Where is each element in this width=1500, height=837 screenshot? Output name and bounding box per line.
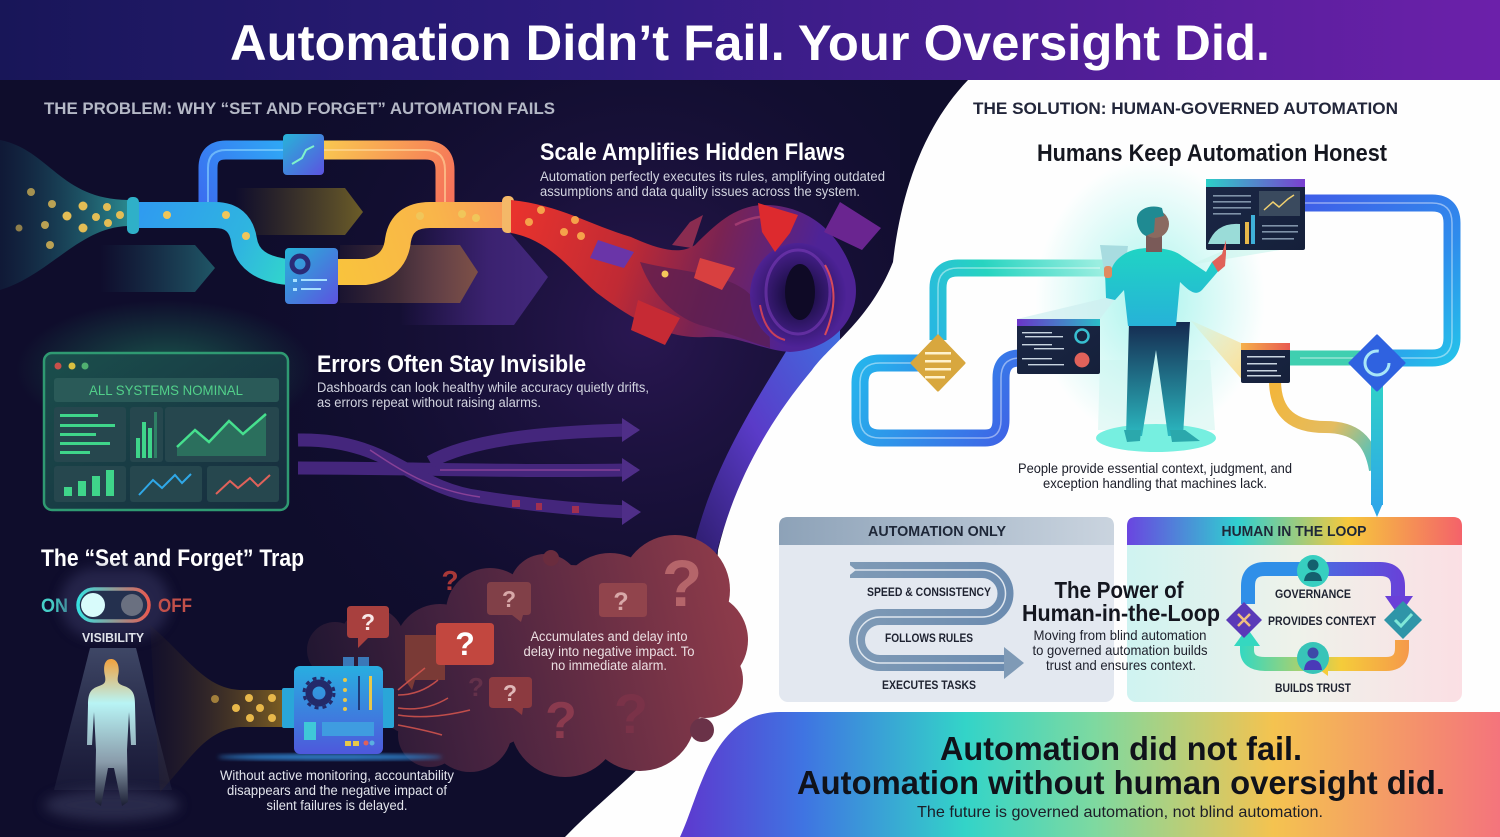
spotlight person xyxy=(44,648,180,821)
connector pipe xyxy=(1288,350,1360,366)
lower blue pipe xyxy=(135,215,288,272)
loop labels: BUILDS TRUST xyxy=(1275,681,1352,695)
lower orange pipe xyxy=(335,215,506,272)
bubble question marks: ? xyxy=(455,626,475,662)
vortex xyxy=(735,216,846,347)
body text: scale amplifies: assumptions and data quality issues across the system. xyxy=(540,184,860,199)
feet xyxy=(1124,430,1200,442)
trust person badge xyxy=(1297,642,1329,674)
conclusion headline: Automation did not fail. xyxy=(940,730,1302,767)
left hand xyxy=(1104,266,1112,278)
light cone xyxy=(54,648,172,790)
right settings card xyxy=(1241,343,1290,383)
golden data funnel xyxy=(150,625,283,792)
automation labels xyxy=(867,585,991,692)
visibility toggle xyxy=(41,568,192,645)
faded question marks: ? xyxy=(441,565,459,596)
machine glow floor xyxy=(218,754,442,760)
tablet xyxy=(1100,245,1128,290)
human governed workflow xyxy=(860,160,1452,517)
panel header: AUTOMATION ONLY xyxy=(868,523,1006,540)
on label: ON xyxy=(41,596,68,617)
gold pipe xyxy=(1275,380,1375,470)
floor disc xyxy=(1096,424,1216,452)
reject diamond xyxy=(1226,602,1262,638)
trouble cloud xyxy=(307,535,748,777)
error streaks xyxy=(398,668,470,735)
list widget xyxy=(54,407,126,462)
faded question marks: ? xyxy=(614,682,648,745)
overlay body: trust and ensures context. xyxy=(1046,657,1196,673)
shirt and arms xyxy=(1105,248,1221,326)
machine caption: disappears and the negative impact of xyxy=(227,783,447,798)
machine caption: Without active monitoring, accountability xyxy=(220,768,454,783)
person silhouette xyxy=(87,659,136,806)
background chevrons xyxy=(100,188,548,325)
question speech bubbles xyxy=(347,582,647,715)
blue trend widget xyxy=(130,466,202,502)
cloud caption: delay into negative impact. To xyxy=(524,644,694,659)
diverging hidden error arrows xyxy=(298,418,641,525)
automation labels: EXECUTES TASKS xyxy=(882,678,976,692)
machine tabs xyxy=(343,657,369,669)
section heading: the problem: THE PROBLEM: WHY “SET AND FORGET” AUTOMATION FAILS xyxy=(44,99,555,118)
governance person badge xyxy=(1297,555,1329,587)
body text: errors: Dashboards can look healthy while accuracy quietly drifts, xyxy=(317,380,649,395)
bubble question marks: ? xyxy=(361,609,375,635)
visibility label: VISIBILITY xyxy=(82,630,144,645)
person glow xyxy=(1035,160,1265,440)
purple background glow xyxy=(180,80,900,740)
body text: errors: as errors repeat without raising alarms. xyxy=(317,395,541,410)
red trend widget xyxy=(207,466,279,502)
light beams xyxy=(1017,250,1280,430)
automation labels: FOLLOWS RULES xyxy=(885,631,973,645)
panel: human in the loop xyxy=(1127,517,1462,702)
overlay heading: Human-in-the-Loop xyxy=(1022,600,1220,626)
cloud caption: Accumulates and delay into xyxy=(530,629,688,644)
line chart widget xyxy=(165,407,279,462)
overlay body: to governed automation builds xyxy=(1032,642,1208,658)
heading: errors often stay invisible: Errors Often Stay Invisible xyxy=(317,351,586,378)
faded question marks: ? xyxy=(662,546,702,620)
bubble question marks xyxy=(361,586,629,706)
flying document scraps xyxy=(590,202,881,345)
loop arrows xyxy=(1247,569,1402,664)
blue loop pipe xyxy=(860,358,1020,438)
loop labels xyxy=(1268,587,1377,695)
small bubbles xyxy=(543,550,714,742)
gear control box xyxy=(285,248,338,304)
input funnel with data dots xyxy=(0,140,130,290)
bubble question marks: ? xyxy=(502,586,516,612)
bubble question marks: ? xyxy=(613,588,629,616)
cloud caption: no immediate alarm. xyxy=(551,658,667,673)
top analytics card xyxy=(1206,179,1305,250)
people caption: People provide essential context, judgment, and xyxy=(1018,460,1292,476)
white right-hand background xyxy=(565,80,1500,837)
faded question marks xyxy=(441,546,702,750)
standing person xyxy=(1096,207,1226,452)
status bar: ALL SYSTEMS NOMINAL xyxy=(89,382,243,398)
machine flanges xyxy=(282,688,394,728)
automation machine xyxy=(218,657,442,760)
left list card xyxy=(1017,319,1100,374)
small bars widget xyxy=(54,466,126,502)
bottom gradient banner xyxy=(680,712,1500,837)
conclusion tagline: The future is governed automation, not blind automation. xyxy=(917,804,1323,821)
bubble question marks: ? xyxy=(503,680,517,706)
window dots xyxy=(54,362,88,370)
faded question marks: ? xyxy=(545,692,577,750)
floor glow xyxy=(44,789,180,821)
approve diamond xyxy=(1384,601,1422,639)
teal pipe xyxy=(938,268,1105,340)
title: Automation Didn’t Fail. Your Oversight Did. xyxy=(230,15,1270,71)
downward arrow pipe xyxy=(1371,385,1383,517)
central overlay: the power of human in the loop xyxy=(1022,577,1220,673)
right blue pipe xyxy=(1300,203,1452,358)
purple edge band of the divider xyxy=(690,325,840,565)
chart valve box xyxy=(283,134,324,175)
loop arrowheads xyxy=(1234,596,1413,676)
pointing hand xyxy=(1212,240,1226,272)
healthy dashboard xyxy=(16,300,316,510)
machine indicators xyxy=(304,676,374,746)
panel header xyxy=(1127,517,1462,545)
pipeline illustration xyxy=(0,134,881,352)
automation labels: SPEED & CONSISTENCY xyxy=(867,585,991,599)
panel header: HUMAN IN THE LOOP xyxy=(1222,523,1366,540)
flanges xyxy=(127,196,514,234)
people caption: exception handling that machines lack. xyxy=(1043,475,1267,491)
loop labels: PROVIDES CONTEXT xyxy=(1268,614,1377,628)
overlay body: Moving from blind automation xyxy=(1034,627,1206,643)
toggle switch xyxy=(60,568,170,638)
green glow xyxy=(16,300,316,440)
machine caption: silent failures is delayed. xyxy=(266,798,408,813)
dashboard window xyxy=(44,353,288,510)
status bar xyxy=(54,378,279,402)
gold list diamond xyxy=(912,336,964,390)
heading: scale amplifies hidden flaws: Scale Amplifies Hidden Flaws xyxy=(540,139,845,166)
pipe dots xyxy=(163,210,480,240)
machine body xyxy=(294,666,383,754)
upper pipe xyxy=(208,150,445,206)
title banner xyxy=(0,0,1500,80)
faded question marks: ? xyxy=(468,672,484,702)
heading: humans keep automation honest: Humans Keep Automation Honest xyxy=(1037,140,1387,167)
section heading: the solution: THE SOLUTION: HUMAN-GOVERNED AUTOMATION xyxy=(973,99,1398,118)
bar widget xyxy=(130,407,163,462)
body text: scale amplifies: Automation perfectly executes its rules, amplifying outdated xyxy=(540,169,885,184)
serpentine arrow xyxy=(846,562,1024,679)
overlay heading: The Power of xyxy=(1054,577,1184,603)
off label: OFF xyxy=(158,596,192,617)
darker fold in ribbon xyxy=(640,262,770,348)
legs xyxy=(1126,322,1190,436)
red droplets xyxy=(525,206,668,278)
loop labels: GOVERNANCE xyxy=(1275,587,1351,601)
machine gear xyxy=(304,678,334,708)
red output ribbon and vortex body xyxy=(511,200,856,352)
blue cycle diamond xyxy=(1350,336,1404,390)
pipe highlights xyxy=(860,203,1452,438)
panel header xyxy=(779,517,1114,545)
conclusion headline: Automation without human oversight did. xyxy=(797,764,1445,801)
head and hair xyxy=(1137,207,1169,252)
heading: the set and forget trap: The “Set and Forget” Trap xyxy=(41,545,304,572)
panel: automation only xyxy=(779,517,1114,702)
